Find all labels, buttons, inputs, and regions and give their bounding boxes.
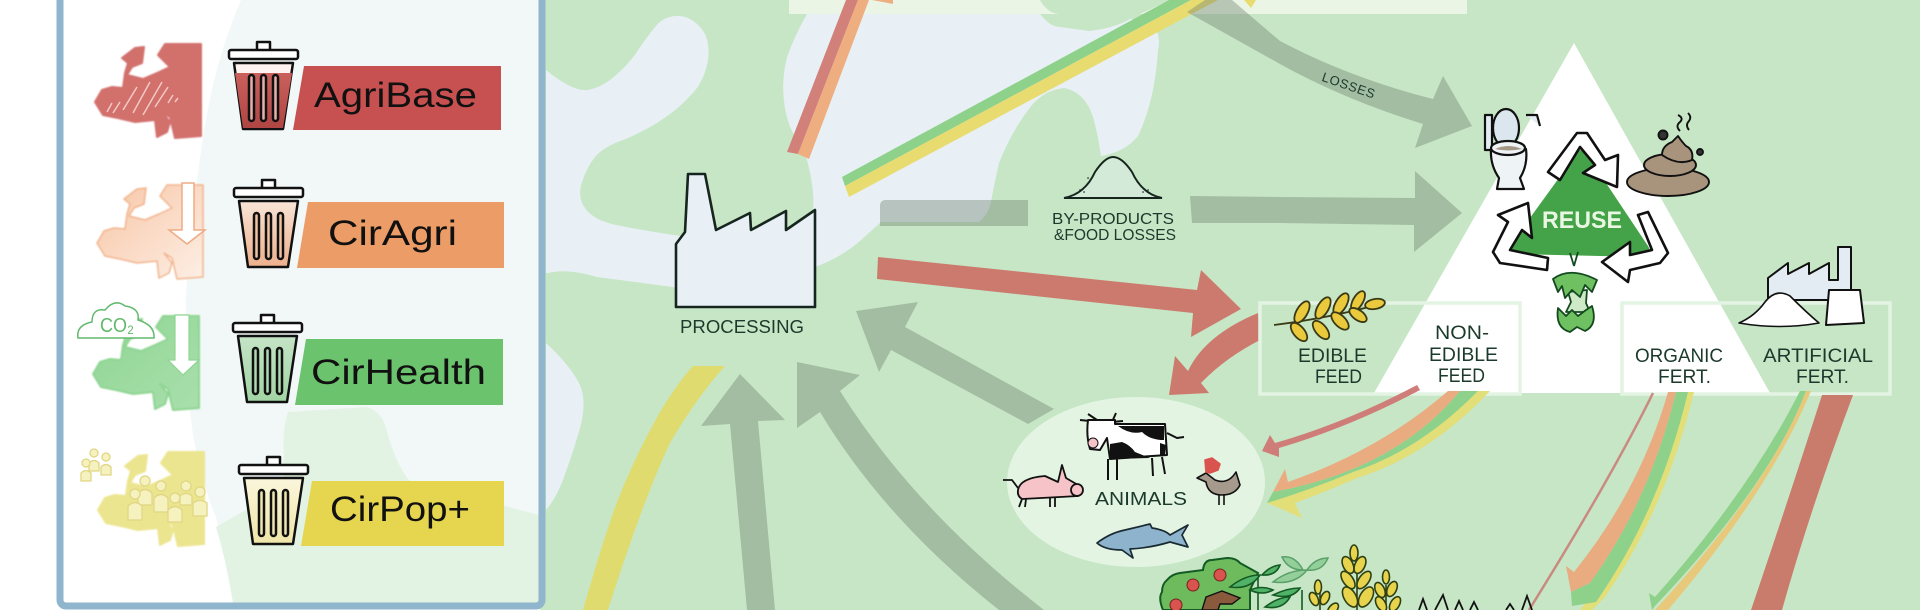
text: by-products and food losses: &FOOD LOSSES xyxy=(1054,227,1176,244)
text: non-edible feed: NON- xyxy=(1435,323,1489,344)
arrow: red processing to feed xyxy=(877,257,1241,337)
text: by-products and food losses: BY-PRODUCTS xyxy=(1052,211,1174,228)
arrow: by-products to reuse xyxy=(1190,171,1462,252)
icon: CO2 cloud: CO₂ xyxy=(100,315,134,337)
icon: factory xyxy=(676,174,815,307)
panel: feed box xyxy=(1260,303,1520,394)
text: edible feed: FEED xyxy=(1315,367,1362,388)
arrow: non-edible feed thin red xyxy=(1262,385,1420,457)
right recycling arrow xyxy=(1602,212,1668,282)
label: CirHealth xyxy=(295,339,503,405)
icon: green leafy plant xyxy=(1230,565,1302,610)
label: CirPop+: CirPop+ xyxy=(330,490,470,529)
icon: grass xyxy=(1419,595,1532,610)
left recycling arrow xyxy=(1493,203,1548,270)
text: non-edible feed: FEED xyxy=(1438,366,1485,387)
icon: apple tree xyxy=(1160,558,1258,610)
label: CirAgri xyxy=(297,202,504,268)
label: CirPop+ xyxy=(301,481,504,546)
panel: fertiliser box xyxy=(1622,303,1890,394)
arrow: red and orange band to top xyxy=(787,0,893,159)
label: CirAgri: CirAgri xyxy=(328,214,457,253)
icon: apple core xyxy=(1553,252,1597,332)
arrow: animals to processing xyxy=(856,302,1054,424)
map: CirPop+ Europe with people xyxy=(81,449,207,546)
arrow: organic fert thin red xyxy=(1529,393,1653,610)
top strip xyxy=(789,0,1467,14)
white reuse triangle xyxy=(1374,43,1770,393)
top recycling arrow xyxy=(1548,133,1618,187)
icon: by-products pile xyxy=(1064,157,1162,198)
map: CirHealth Europe xyxy=(78,303,199,410)
text: processing: PROCESSING xyxy=(680,317,804,337)
bin: CirAgri xyxy=(234,180,303,267)
map: AgriBase Europe xyxy=(95,44,201,138)
icon: green pale plant xyxy=(1273,557,1328,582)
panel: scenario legend xyxy=(60,0,542,606)
icon: pig xyxy=(1003,465,1083,507)
text: artificial fertiliser: ARTIFICIAL xyxy=(1763,346,1873,367)
arrow: artificial fert red xyxy=(1751,395,1853,610)
map: CirAgri Europe xyxy=(97,183,205,279)
bin: CirHealth xyxy=(233,315,302,402)
arrow: crops straight to processing xyxy=(701,374,785,610)
text: non-edible feed: EDIBLE xyxy=(1429,345,1498,366)
arrow: non-edible feed multi band xyxy=(1267,391,1490,518)
icon: wheat ear edible feed xyxy=(1274,289,1386,344)
text: organic fertiliser: ORGANIC xyxy=(1635,346,1723,367)
text: losses: LOSSES xyxy=(1320,69,1378,102)
label: AgriBase xyxy=(293,66,501,130)
arrow: organic fert multi band xyxy=(1566,392,1694,610)
arrow: red feed to animals xyxy=(1169,313,1260,395)
icon: manure pile xyxy=(1627,113,1709,196)
icon: artificial fertiliser factory xyxy=(1739,247,1864,326)
text: edible feed: EDIBLE xyxy=(1298,346,1367,367)
icon: chicken xyxy=(1197,458,1240,505)
label: AgriBase: AgriBase xyxy=(314,76,477,115)
text: organic fertiliser: FERT. xyxy=(1658,367,1711,388)
label: CirHealth: CirHealth xyxy=(311,353,486,392)
arrow: yellow curved flow into processing xyxy=(583,366,725,610)
text: reuse: REUSE xyxy=(1542,207,1622,234)
icon: recycling triangle xyxy=(1493,133,1668,282)
arrow: green and yellow band to top xyxy=(842,0,1256,197)
bin: AgriBase xyxy=(229,42,298,129)
arrow: crops curved to processing xyxy=(797,362,1044,610)
icon: fish xyxy=(1097,524,1188,558)
panel: animals xyxy=(1003,397,1265,567)
bin: CirPop+ xyxy=(239,457,308,544)
text: artificial fertiliser: FERT. xyxy=(1796,367,1849,388)
icon: toilet xyxy=(1485,109,1540,189)
icon: wheat xyxy=(1307,545,1403,610)
text: animals: ANIMALS xyxy=(1095,489,1187,509)
arrow: losses to reuse xyxy=(1187,0,1472,148)
arrow: processing to by-products xyxy=(880,200,1028,226)
icon: cow xyxy=(1080,413,1184,480)
arrow: artificial fert multi band xyxy=(1649,391,1811,610)
